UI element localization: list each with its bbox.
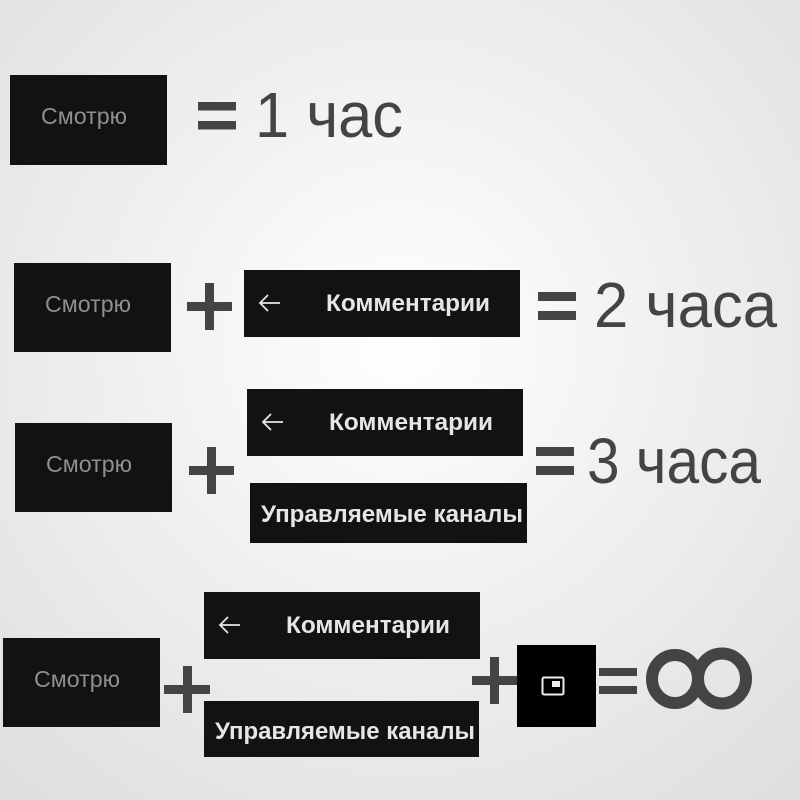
button: comments — [204, 592, 480, 659]
button: picture in picture — [517, 645, 596, 727]
button: managed channels — [204, 701, 479, 757]
button: comments — [247, 389, 523, 456]
row 4: everything equals infinity — [3, 592, 746, 757]
plus sign — [472, 657, 517, 704]
button: watching — [15, 423, 172, 512]
button: watching — [3, 638, 160, 727]
equals sign — [538, 292, 576, 320]
row 2: watching plus comments equals 2 hours — [14, 263, 777, 352]
button: watching: Смотрю — [46, 451, 132, 477]
text: 2 hours: 2 часа — [594, 269, 777, 341]
row 3: watching plus comments and managed channels equals 3 hours — [15, 389, 761, 543]
equals sign — [198, 102, 236, 130]
button: watching — [10, 75, 167, 165]
button: managed channels: Управляемые каналы — [215, 718, 475, 745]
infinity symbol — [652, 654, 746, 704]
button: watching: Смотрю — [41, 103, 127, 129]
text: 1 hour: 1 час — [255, 79, 403, 151]
equals sign — [599, 668, 637, 694]
button: watching: Смотрю — [34, 666, 120, 692]
button: watching — [14, 263, 171, 352]
plus sign — [187, 283, 232, 330]
button: comments — [244, 270, 520, 337]
button: managed channels — [250, 483, 527, 543]
text: 3 hours: 3 часа — [587, 425, 761, 497]
button: watching: Смотрю — [45, 291, 131, 317]
row 1: watching equals 1 hour — [10, 75, 403, 165]
button: comments: Комментарии — [326, 290, 490, 317]
plus sign — [164, 666, 210, 713]
plus sign — [189, 447, 234, 494]
button: comments: Комментарии — [329, 409, 493, 436]
button: comments: Комментарии — [286, 612, 450, 639]
equals sign — [536, 447, 574, 475]
button: managed channels: Управляемые каналы — [261, 501, 523, 528]
